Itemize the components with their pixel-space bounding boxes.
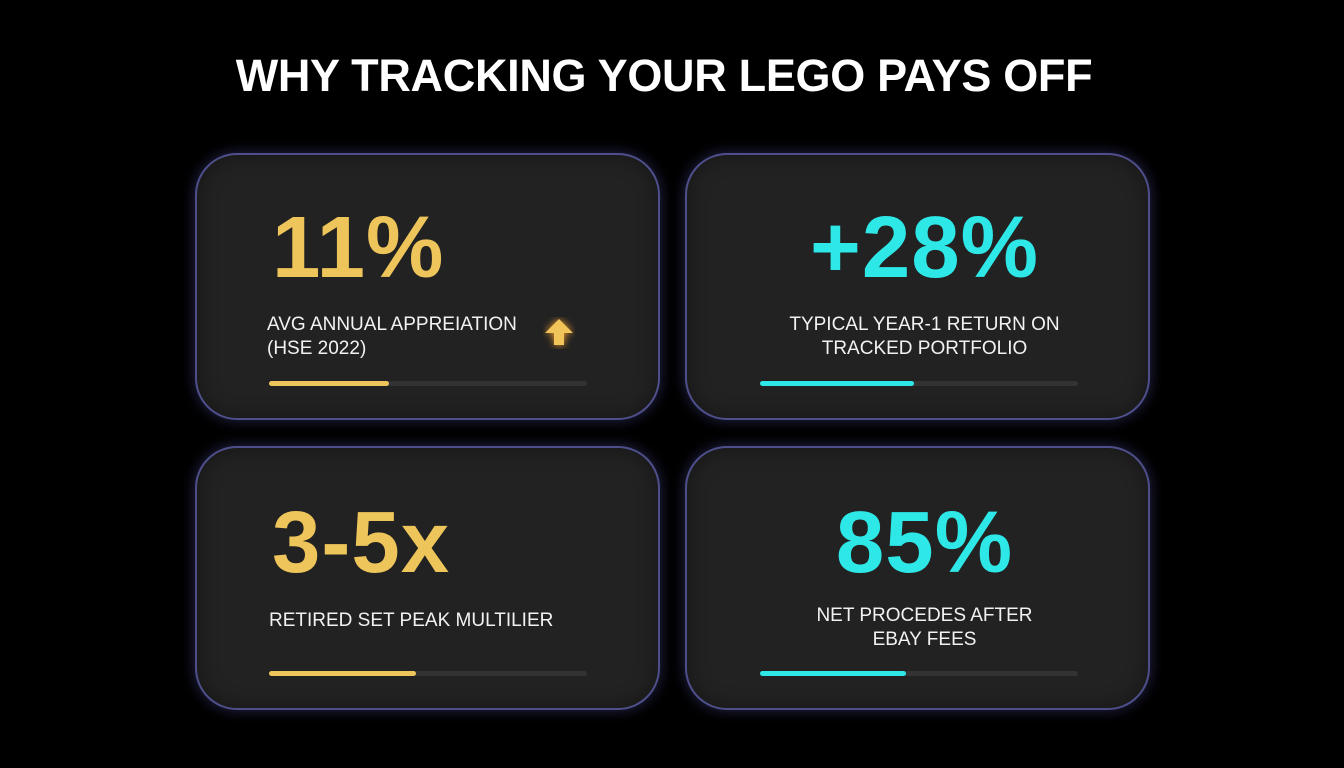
stat number: 11% xyxy=(272,199,444,296)
stat number: +28% xyxy=(810,199,1039,296)
label xyxy=(267,314,517,359)
label: TYPICAL YEAR-1 RETURN ON xyxy=(789,314,1060,335)
progress bar xyxy=(760,671,1078,676)
panel: annual appreciation xyxy=(195,153,660,420)
progress bar xyxy=(760,381,1078,386)
title: WHY TRACKING YOUR LEGO PAYS OFF xyxy=(236,50,1092,101)
label: EBAY FEES xyxy=(873,629,976,650)
label xyxy=(789,314,1060,359)
label xyxy=(816,605,1033,650)
label: TRACKED PORTFOLIO xyxy=(822,338,1027,359)
label: (HSE 2022) xyxy=(267,338,366,359)
label: NET PROCEDES AFTER xyxy=(816,605,1033,626)
progress bar xyxy=(269,381,587,386)
panel: net proceeds xyxy=(685,446,1150,710)
progress bar xyxy=(269,671,587,676)
label: RETIRED SET PEAK MULTILIER xyxy=(269,610,553,631)
panel: year-1 return xyxy=(685,153,1150,420)
stat number: 85% xyxy=(836,494,1013,591)
icon: up arrow xyxy=(543,317,575,349)
stat number: 3-5x xyxy=(272,494,450,591)
panel: retired set multiplier xyxy=(195,446,660,710)
label: AVG ANNUAL APPREIATION xyxy=(267,314,517,335)
